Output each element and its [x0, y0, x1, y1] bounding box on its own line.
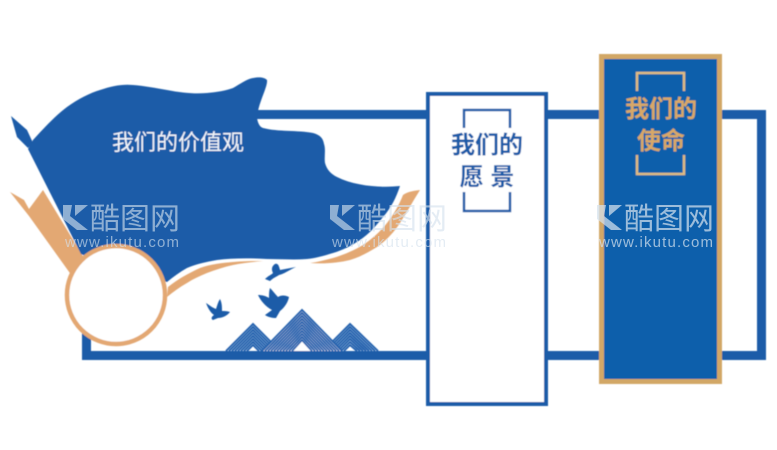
panel: mission: [602, 56, 720, 382]
mission heading: 我们的: [625, 96, 697, 123]
mission bracket bottom: [637, 155, 684, 174]
vision heading: 我们的: [451, 132, 523, 159]
watermark center: 酷图网: [357, 203, 447, 236]
frame: connecting outline: [82, 110, 766, 360]
watermark center: [330, 203, 447, 251]
panel: vision: [428, 94, 546, 404]
values heading: 我们的价值观: [112, 130, 244, 155]
vision bracket top: [464, 110, 510, 128]
photo circle: [67, 246, 165, 344]
watermark right: [597, 203, 714, 251]
mission heading line 2: 使命: [637, 127, 685, 155]
tan pennant: left tail: [10, 190, 84, 276]
watermark left: 酷图网: [90, 203, 180, 236]
vision bracket bottom: [464, 192, 510, 211]
icon: flagpole tip: [11, 116, 33, 148]
vision heading line 2: 愿 景: [460, 164, 514, 191]
mission bracket top: [637, 73, 684, 91]
watermark right: 酷图网: [624, 203, 714, 236]
tan swoosh: right: [310, 190, 420, 263]
watermark center: www.ikutu.com: [331, 234, 446, 251]
tan swoosh: lower: [167, 261, 263, 297]
watermark right: www.ikutu.com: [598, 234, 713, 251]
watermark left: www.ikutu.com: [64, 234, 179, 251]
watermark left: [63, 203, 180, 251]
icon: mountains: [226, 310, 378, 351]
icon: birds: [206, 264, 296, 320]
blue flag: values banner: [28, 77, 400, 282]
